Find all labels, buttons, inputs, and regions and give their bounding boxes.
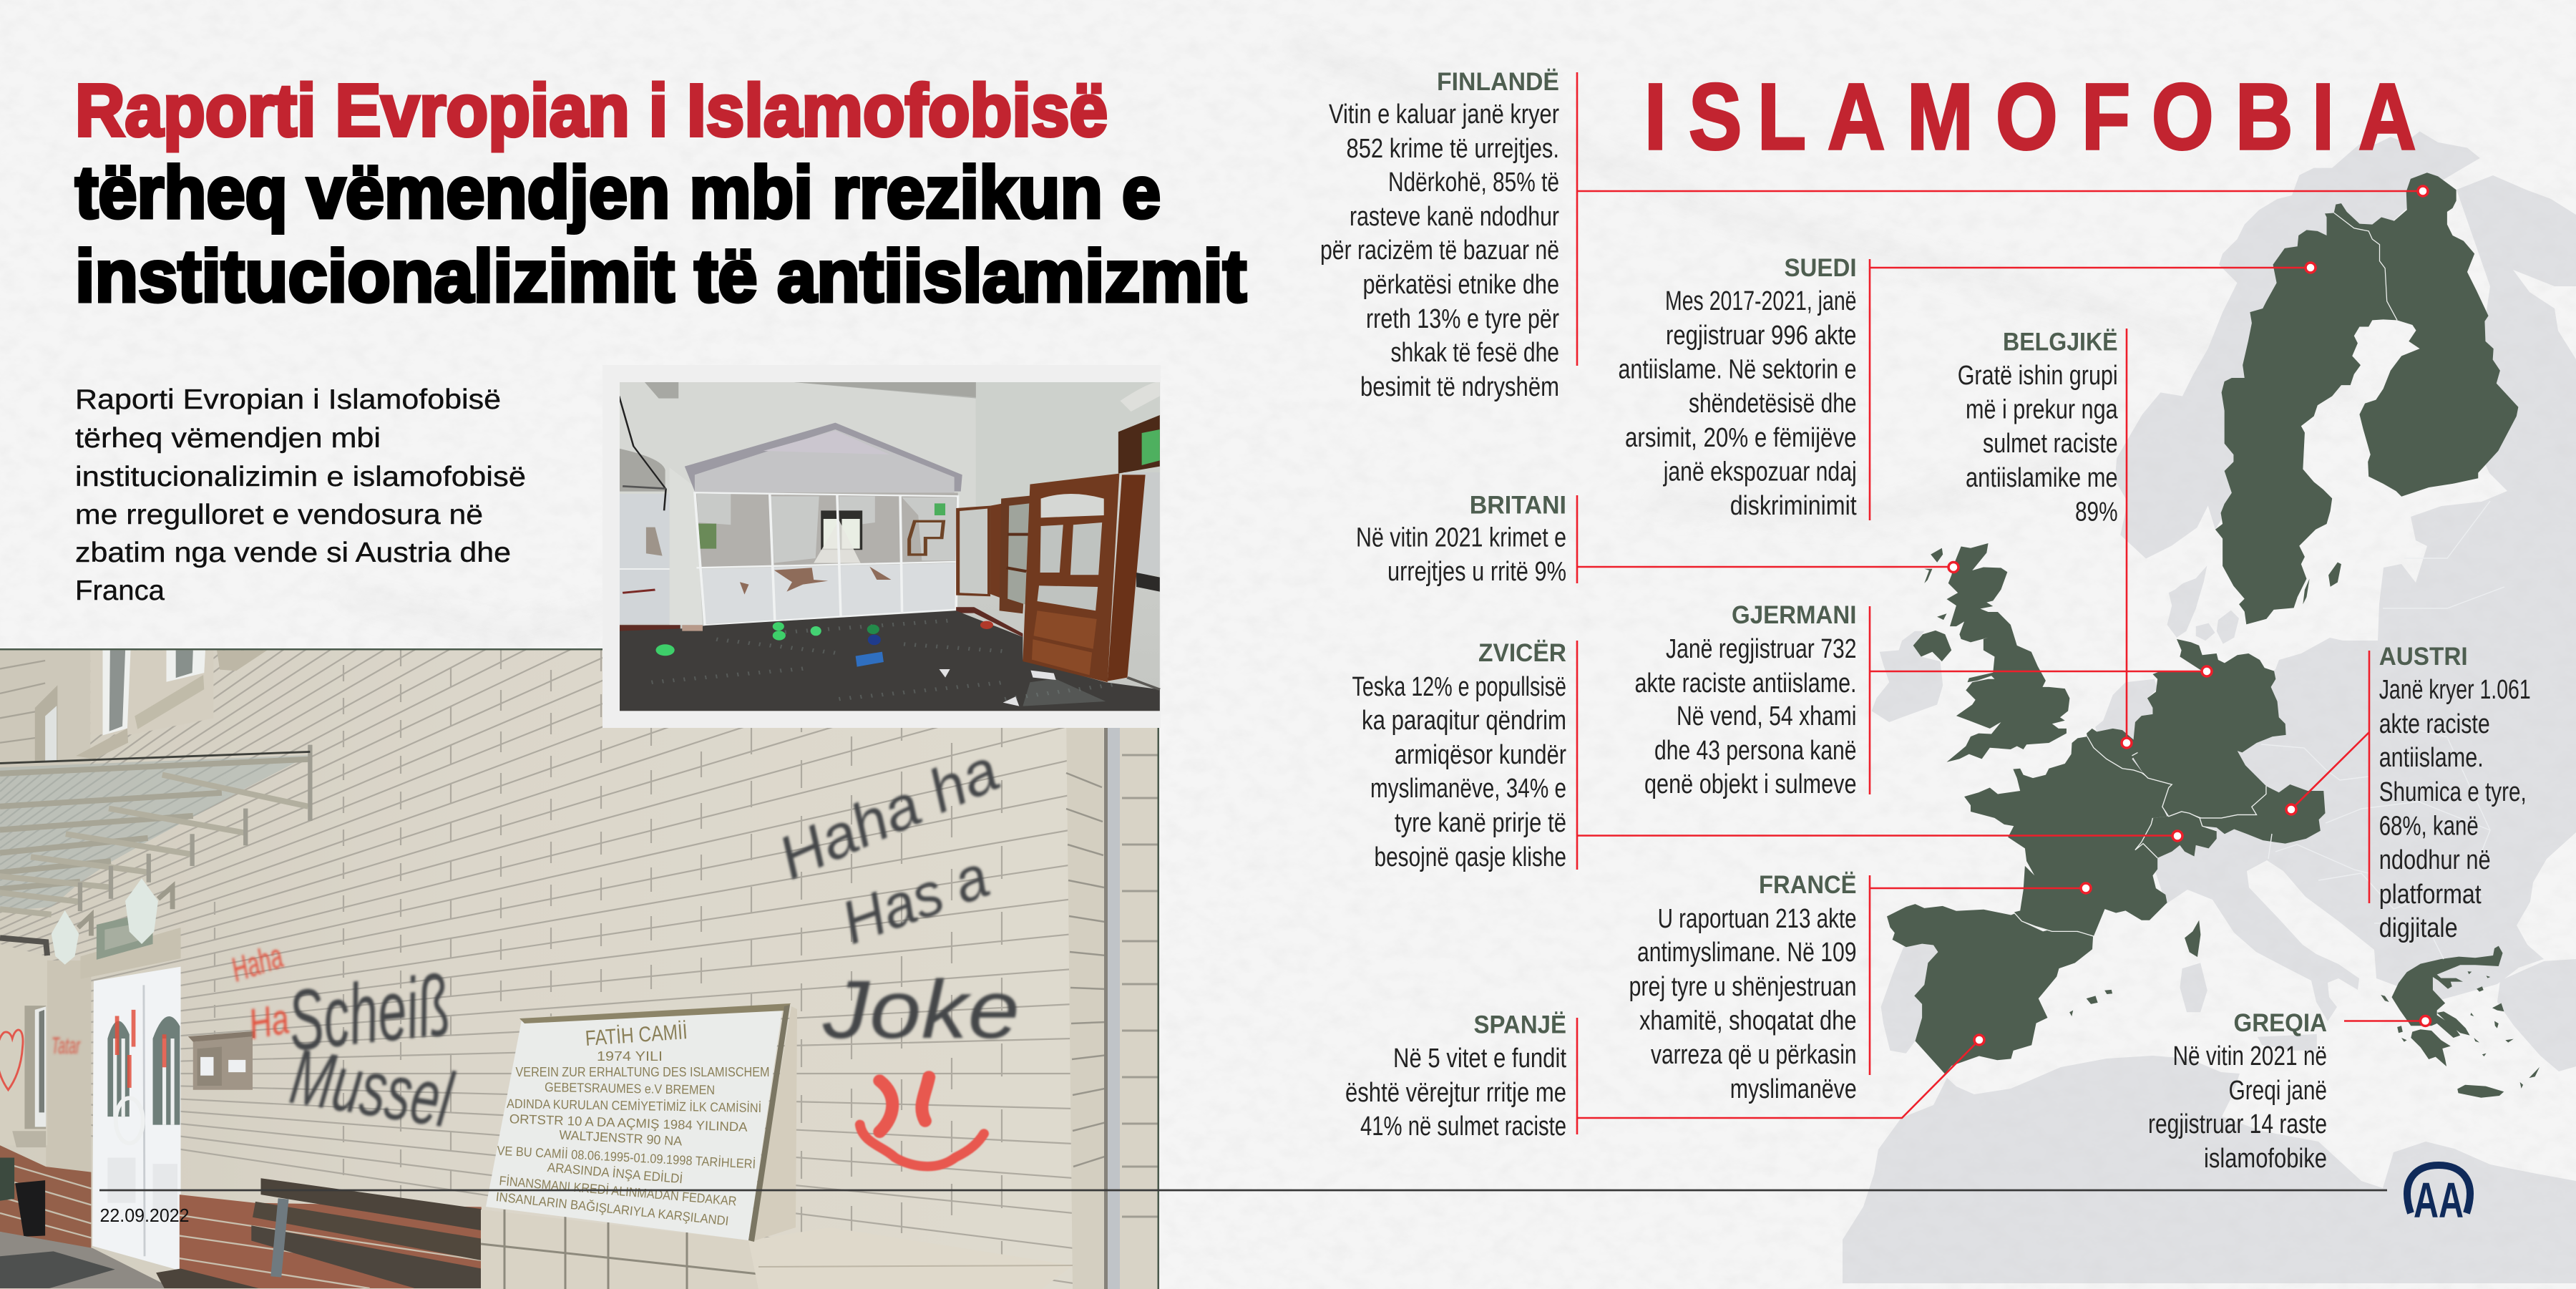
red spray-painted smiley <box>860 1077 984 1167</box>
panel: Suedi: shëndetësisë dhe <box>1689 389 1856 419</box>
panel: Gjermani: Janë regjistruar 732 <box>1666 634 1856 664</box>
panel: Gjermani: qenë objekt i sulmeve <box>1644 769 1856 799</box>
memorial plaque: ORTSTR 10 A DA AÇMIŞ 1984 YILINDA <box>509 1112 748 1134</box>
land: North Africa <box>1843 1056 2576 1283</box>
panel: Francë <box>1629 871 2091 1104</box>
panel: Austri: Shumica e tyre, <box>2379 777 2527 807</box>
map: highlighted countries <box>1887 172 2540 1098</box>
panel: Suedi: SUEDI <box>1785 254 1856 282</box>
country: Switzerland <box>2135 812 2217 858</box>
panel: Belgjikë: Gratë ishin grupi <box>1958 361 2118 391</box>
memorial plaque: GEBETSRAUMES e.V BREMEN <box>545 1080 715 1097</box>
panel: Britani: urrejtjes u rritë 9% <box>1387 557 1566 587</box>
panel: Francë: FRANCË <box>1759 871 1856 899</box>
country: Spain <box>1887 904 2112 1074</box>
footer: rule line <box>99 1190 2387 1191</box>
title: heading in red and black: tërheq vëmendjen mbi rrezikun e <box>75 151 1161 233</box>
panel: Austri: platformat <box>2379 880 2482 910</box>
panel: Austri: digjitale <box>2379 913 2458 943</box>
panel: Greqia: Greqi janë <box>2229 1076 2327 1106</box>
memorial plaque <box>486 1003 791 1242</box>
panel: Suedi: regjistruar 996 akte <box>1666 321 1856 351</box>
country: Greece <box>2381 946 2514 1066</box>
red brick plinth and wooden bench <box>156 1178 482 1288</box>
panel: Austri: antiislame. <box>2379 743 2484 773</box>
panel: Belgjikë: 89% <box>2075 497 2118 527</box>
panel: Britani: Në vitin 2021 krimet e <box>1356 522 1566 553</box>
panel: Zvicër: tyre kanë prirje të <box>1395 808 1566 838</box>
memorial plaque: İNSANLARIN BAĞIŞLARIYLA KARŞILANDI <box>495 1189 729 1228</box>
panel: Zvicër: ZVICËR <box>1478 639 1566 667</box>
panel: Suedi: janë ekspozuar ndaj <box>1663 457 1857 487</box>
panel: Belgjikë: antiislamike me <box>1966 463 2118 493</box>
panel: Finlandë: rreth 13% e tyre për <box>1366 304 1559 334</box>
intro paragraph <box>75 384 526 606</box>
country: Germany <box>2132 639 2286 818</box>
panel: Francë: prej tyre u shënjestruan <box>1629 972 1856 1002</box>
land: Turkey <box>2497 959 2576 1071</box>
graffiti: Tatar <box>52 1033 81 1059</box>
entrance: door, lamps, sign and mailbox <box>0 878 255 1288</box>
panel: Finlandë: Ndërkohë, 85% të <box>1388 167 1559 198</box>
panel: Gjermani: dhe 43 persona kanë <box>1654 736 1856 766</box>
panel: Britani: BRITANI <box>1470 492 1566 520</box>
memorial plaque: 1974 YILI <box>597 1049 663 1064</box>
panel: Francë: antimyslimane. Në 109 <box>1637 938 1856 968</box>
memorial plaque: FATİH CAMİİ <box>585 1020 688 1051</box>
graffiti: Scheiß <box>284 957 454 1069</box>
land: Norway <box>2115 132 2480 559</box>
country: Finland <box>2334 172 2518 497</box>
intro paragraph: Raporti Evropian i Islamofobisë <box>75 384 501 415</box>
graffiti: Haha ha <box>769 736 1009 892</box>
land: Denmark <box>2167 565 2239 644</box>
panel: Belgjikë: BELGJIKË <box>2003 329 2118 356</box>
panel: Gjermani: akte raciste antiislame. <box>1634 668 1856 699</box>
land: Portugal <box>1881 944 1938 1054</box>
panel: Zvicër: ka paraqitur qëndrim <box>1362 706 1566 736</box>
panel: Zvicër: myslimanëve, 34% e <box>1370 774 1566 804</box>
intro paragraph: institucionalizimin e islamofobisë <box>75 462 526 492</box>
panel: Austri: ndodhur në <box>2379 845 2491 875</box>
panel: Greqia: GREQIA <box>2234 1009 2327 1037</box>
panel: Francë: U raportuan 213 akte <box>1658 904 1857 934</box>
panel: Belgjikë: më i prekur nga <box>1966 395 2118 425</box>
panel: Austri: AUSTRI <box>2379 643 2468 671</box>
land: Netherlands, Luxembourg and Ireland <box>1872 631 2157 773</box>
panel: Spanjë: SPANJË <box>1474 1011 1566 1039</box>
panel: Greqia: Në vitin 2021 në <box>2172 1041 2327 1071</box>
photo: damaged mosque interior with broken glass <box>619 381 1160 711</box>
icon: Anadolu Agency logo: AA <box>2414 1172 2464 1228</box>
panel: Britani <box>1356 492 1958 587</box>
glass canopy <box>0 745 310 915</box>
intro paragraph: tërheq vëmendjen mbi <box>75 423 381 454</box>
memorial plaque: VE BU CAMİİ 08.06.1995-01.09.1998 TARİHLERİ <box>497 1144 756 1171</box>
country: Belgium <box>2087 729 2143 773</box>
panel: Francë: varreza që u përkasin <box>1651 1040 1856 1070</box>
panel: Spanjë: Në 5 vitet e fundit <box>1393 1044 1566 1074</box>
panel: Austri: akte raciste <box>2379 709 2490 739</box>
panel: Suedi: antiislame. Në sektorin e <box>1619 355 1856 385</box>
title: heading in red and black <box>75 69 1246 317</box>
panel: Finlandë: rasteve kanë ndodhur <box>1350 202 1559 232</box>
graffiti: Mussel <box>285 1032 459 1144</box>
panel: Gjermani: Në vend, 54 xhami <box>1677 701 1856 731</box>
panel: Finlandë: FINLANDË <box>1437 68 1559 96</box>
panel: Belgjikë: sulmet raciste <box>1983 429 2118 459</box>
memorial plaque: ADINDA KURULAN CEMİYETİMİZ İLK CAMİSİNİ <box>507 1096 761 1115</box>
footer: date: 22.09.2022 <box>100 1205 189 1226</box>
panel: Suedi <box>1619 254 2316 521</box>
photo edge lines <box>0 648 1159 1289</box>
panel: Austri: 68%, kanë <box>2379 812 2479 842</box>
title: heading in red and black: Raporti Evropian i Islamofobisë <box>75 69 1108 152</box>
graffiti: Joke <box>822 964 1020 1056</box>
island: Crete <box>2457 1067 2540 1098</box>
country: Austria <box>2200 784 2326 844</box>
intro paragraph: Franca <box>75 575 165 606</box>
panel: Finlandë <box>1320 68 2428 402</box>
panel: Suedi: diskriminimit <box>1730 491 1857 521</box>
panel: Austri <box>2286 643 2531 943</box>
intro paragraph: zbatim nga vende si Austria dhe <box>75 538 511 568</box>
graffiti <box>52 736 1020 1144</box>
title: heading in red and black: institucionalizimit të antiislamizmit <box>75 235 1246 317</box>
photo: vandalised mosque facade with graffiti <box>0 648 1159 1289</box>
panel: Spanjë: 41% në sulmet raciste <box>1360 1112 1566 1142</box>
red heart graffiti <box>0 1030 23 1090</box>
panel: Zvicër: besojnë qasje klishe <box>1374 842 1566 872</box>
panel: Greqia: regjistruar 14 raste <box>2148 1109 2327 1139</box>
land: Eastern Europe and Italy <box>2140 175 2576 1021</box>
brick joints <box>215 648 1002 1288</box>
graffiti: Ha <box>245 994 292 1049</box>
panel: Francë: xhamitë, shoqatat dhe <box>1639 1006 1856 1036</box>
graffiti: Has a <box>833 842 997 958</box>
panel: Gjermani <box>1634 601 2212 799</box>
panel: Finlandë: për racizëm të bazuar në <box>1320 235 1559 266</box>
map: grey background countries <box>1843 132 2576 1283</box>
stone base and ledge <box>481 1006 1073 1289</box>
icon: Anadolu Agency logo <box>2407 1165 2470 1228</box>
panel: Greqia: islamofobike <box>2204 1144 2327 1174</box>
building corner and drainpipe <box>1066 728 1158 1289</box>
panel: Finlandë: Vitin e kaluar janë kryer <box>1329 99 1559 130</box>
country: United Kingdom <box>1913 543 2069 762</box>
photo frame <box>602 365 1161 728</box>
land: Sardinia and Sicily <box>2180 963 2317 1051</box>
panel: Finlandë: përkatësi etnike dhe <box>1362 270 1559 300</box>
panel: Greqia <box>2148 1009 2430 1174</box>
memorial plaque: VEREIN ZUR ERHALTUNG DES ISLAMISCHEM <box>515 1065 770 1079</box>
headline: ISLAMOFOBIA: ISLAMOFOBIA <box>1644 64 2416 169</box>
country: Sweden <box>2215 213 2397 624</box>
panel: Finlandë: 852 krime të urrejtjes. <box>1347 134 1559 164</box>
panel: Zvicër: Teska 12% e popullsisë <box>1352 672 1566 702</box>
memorial plaque: FİNANSMANI KREDİ ALINMADAN FEDAKAR <box>499 1174 737 1208</box>
map: white borders between countries <box>2014 213 2504 959</box>
upper left windows and sills <box>0 644 267 776</box>
intro paragraph: me rregulloret e vendosura në <box>75 500 483 530</box>
panel: Belgjikë <box>1958 329 2132 748</box>
panel: Zvicër <box>1352 639 2182 872</box>
memorial plaque: WALTJENSTR 90 NA <box>559 1128 683 1148</box>
panel: Austri: Janë kryer 1.061 <box>2379 675 2531 705</box>
panel: Suedi: arsimit, 20% e fëmijëve <box>1625 423 1856 453</box>
panel: Finlandë: shkak të fesë dhe <box>1391 338 1559 368</box>
panel: Gjermani: GJERMANI <box>1732 601 1856 629</box>
panel: Francë: myslimanëve <box>1730 1074 1857 1104</box>
country: France <box>1964 736 2200 957</box>
panel: Spanjë <box>1345 1011 1984 1142</box>
panel: Zvicër: armiqësor kundër <box>1395 740 1566 770</box>
panel: Finlandë: besimit të ndryshëm <box>1360 372 1559 402</box>
graffiti: Haha <box>227 938 288 989</box>
brick courses <box>0 650 1073 1284</box>
memorial plaque: ARASINDA İNŞA EDİLDİ <box>547 1160 683 1186</box>
panel: Suedi: Mes 2017-2021, janë <box>1665 286 1856 316</box>
panel: Spanjë: është vërejtur rritje me <box>1345 1078 1566 1108</box>
